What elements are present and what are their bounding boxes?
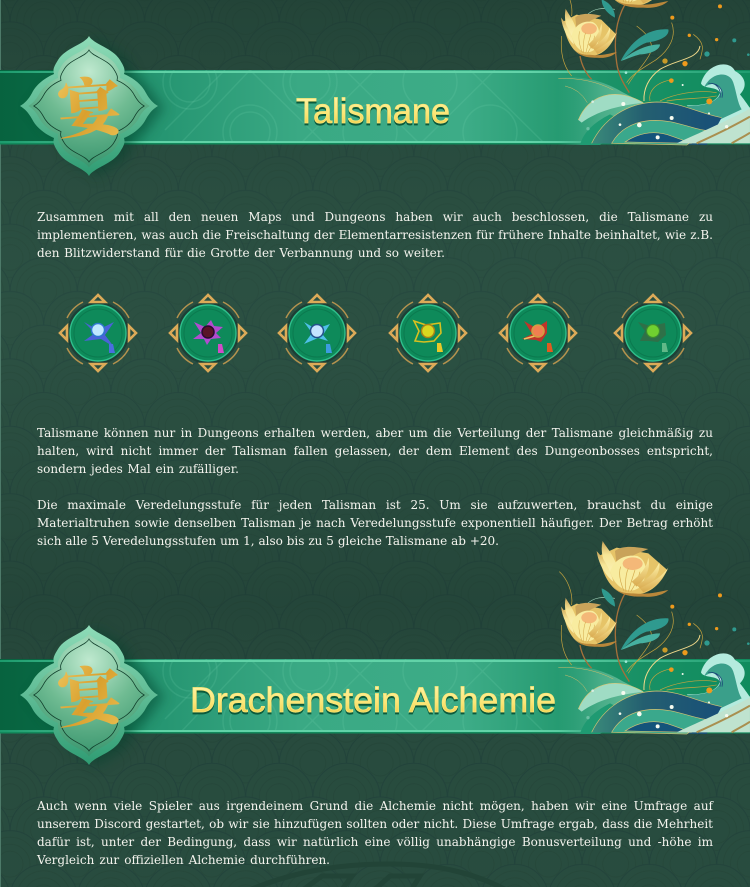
emblem badge: Talismane — [20, 36, 166, 178]
text block: intro paragraph: implementieren, was auch die Freischaltung der Elementarresistenzen für frühere Inhalte beinhaltet, wie z.B. — [37, 228, 713, 242]
icon: talisman 4 yellow — [390, 295, 466, 371]
icon: talisman 6 green — [615, 295, 691, 371]
text block: talisman drops — [37, 426, 713, 476]
section banner: Talismane — [0, 0, 750, 159]
illustration: chrysanthemums and waves — [558, 0, 750, 145]
heading: Drachenstein Alchemie: Drachenstein Alchemie — [190, 681, 556, 720]
text block: alchemy paragraph: dafür ist, unter der Bedingung, dass wir natürlich eine völlig unabhängige Bonusverteilung und -höhe im — [37, 835, 713, 849]
icon: talisman 5 red — [500, 295, 576, 371]
text block: intro paragraph: Zusammen mit all den neuen Maps und Dungeons haben wir auch beschlossen, die Talismane zu — [37, 210, 713, 224]
heading: Talismane: Talismane — [296, 92, 450, 131]
text block: upgrade levels: sich alle 5 Veredelungsstufen um 1, also bis zu 5 gleiche Talismane ab +20. — [37, 534, 499, 548]
emblem badge: Drachenstein Alchemie: 宴 — [54, 645, 129, 741]
emblem badge: Talismane: 宴 — [54, 56, 129, 152]
faint bottom ornament — [245, 864, 510, 887]
illustration: chrysanthemums and waves — [558, 541, 750, 734]
icon: talisman 3 light blue — [279, 295, 355, 371]
text block: alchemy paragraph: unserem Discord gestartet, ob wir sie hinzufügen sollten oder nicht. Diese Umfrage ergab, dass die Mehrheit — [37, 817, 713, 831]
emblem badge: Drachenstein Alchemie — [20, 625, 166, 767]
text block: talisman drops: sondern jedes Mal ein zufälliger. — [37, 462, 239, 476]
text block: alchemy paragraph: Auch wenn viele Spieler aus irgendeinem Grund die Alchemie nicht mögen, haben wir eine Umfrage auf — [37, 799, 713, 813]
text block: talisman drops: halten, wird nicht immer der Talisman fallen gelassen, der dem Element des Dungeonbosses entspricht, — [37, 444, 713, 458]
text block: talisman drops: Talismane können nur in Dungeons erhalten werden, aber um die Verteilung der Talismane gleichmäßig zu — [37, 426, 713, 440]
icon: talisman 1 blue — [60, 295, 136, 371]
text block: upgrade levels: Materialtruhen sowie denselben Talisman je nach Veredelungsstufe exponentiell häufiger. Der Betrag erhöht — [37, 516, 713, 530]
text block: upgrade levels: Die maximale Veredelungsstufe für jeden Talisman ist 25. Um sie aufzuwerten, brauchst du einige — [37, 498, 713, 512]
text block: alchemy paragraph — [36, 799, 714, 867]
text block: intro paragraph — [37, 210, 713, 260]
text block: alchemy paragraph: Vergleich zur offiziellen Alchemie durchführen. — [37, 853, 330, 867]
icon: talisman 2 purple — [170, 295, 246, 371]
text block: upgrade levels — [37, 498, 713, 548]
section banner: Drachenstein Alchemie — [0, 541, 750, 748]
text block: intro paragraph: den Blitzwiderstand für die Grotte der Verbannung und so weiter. — [37, 246, 445, 260]
